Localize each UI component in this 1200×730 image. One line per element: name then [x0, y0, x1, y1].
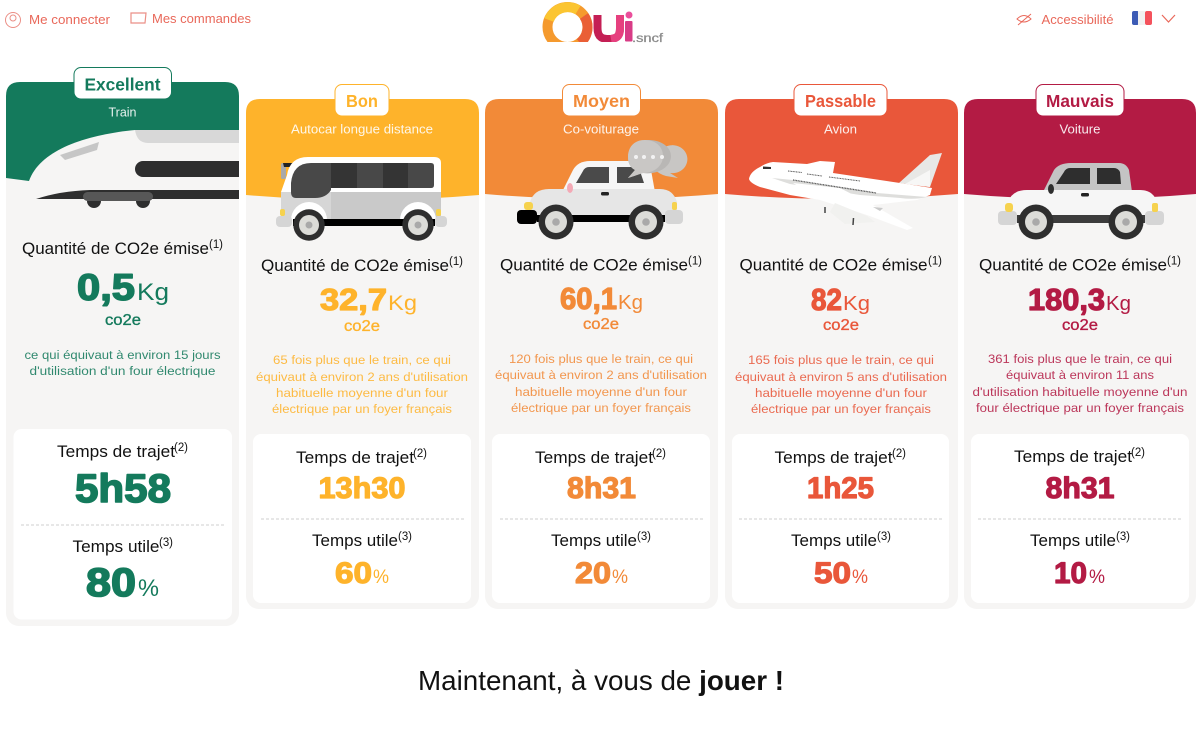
useful time: 20	[575, 557, 611, 590]
rating badge: Moyen	[573, 91, 630, 111]
travel time: (2)	[652, 448, 666, 460]
card background	[725, 99, 958, 609]
illustration: bus	[276, 157, 447, 241]
useful time: %	[138, 575, 159, 602]
rating badge	[335, 84, 389, 116]
useful time: %	[612, 567, 628, 588]
link: accessibilite: Accessibilité	[1042, 12, 1114, 27]
description: habituelle moyenne d'un four	[755, 386, 927, 400]
travel time: (2)	[1131, 447, 1145, 459]
useful time	[1030, 531, 1130, 590]
stats panel	[732, 434, 949, 603]
travel time	[535, 448, 666, 505]
icon: ticket	[131, 13, 146, 23]
description: d'utilisation habituelle moyenne d'un	[972, 385, 1188, 399]
co2 heading: (1)	[209, 239, 223, 251]
useful time: 10	[1054, 557, 1087, 590]
card background	[485, 99, 718, 609]
co2 heading: (1)	[688, 256, 702, 268]
travel time: Temps de trajet	[57, 443, 176, 461]
description: habituelle moyenne d'un four	[515, 385, 687, 399]
useful time: %	[852, 567, 868, 588]
co2 heading: Quantité de CO2e émise	[979, 256, 1167, 274]
useful time: 60	[335, 557, 372, 590]
rating badge	[794, 84, 887, 116]
speech bubbles	[628, 140, 687, 178]
header: accessibility and language	[1017, 11, 1175, 27]
travel time	[296, 448, 427, 505]
co2 heading: (1)	[449, 256, 463, 268]
description: électrique par un foyer français	[751, 402, 931, 416]
description: ce qui équivaut à environ 15 jours	[24, 348, 220, 362]
rating badge	[74, 68, 172, 99]
travel time: Temps de trajet	[535, 449, 654, 467]
description: électrique par un foyer français	[511, 401, 691, 415]
logo: OUI.sncf	[548, 7, 664, 47]
co2 value: co2e	[344, 318, 380, 335]
travel time: 8h31	[567, 472, 636, 505]
travel time: (2)	[413, 448, 427, 460]
travel time	[1014, 447, 1145, 505]
co2 value: Kg	[843, 293, 870, 315]
co2 value: 60,1	[560, 281, 617, 316]
panel: autocar bon	[246, 84, 479, 609]
co2 value: Kg	[388, 292, 417, 315]
co2 value	[320, 282, 417, 335]
co2 heading: Quantité de CO2e émise	[261, 257, 449, 275]
travel time: 8h31	[1046, 472, 1114, 505]
co2 value: co2e	[583, 316, 619, 333]
header: account links	[6, 11, 251, 28]
co2 heading: Quantité de CO2e émise	[22, 240, 209, 258]
co2 value: Kg	[1106, 293, 1131, 315]
co2 value: co2e	[1062, 317, 1098, 334]
mode: Train	[108, 106, 137, 120]
stats panel	[14, 429, 232, 620]
description: habituelle moyenne d'un four	[276, 386, 448, 400]
description: équivaut à environ 11 ans	[1006, 368, 1154, 382]
description: 120 fois plus que le train, ce qui	[509, 352, 693, 366]
icon: user	[6, 12, 20, 28]
description	[972, 352, 1188, 415]
card colour header	[6, 82, 239, 195]
card background	[6, 82, 239, 626]
co2 value: 82	[811, 282, 842, 317]
card background	[246, 99, 479, 609]
co2 heading: Quantité de CO2e émise	[500, 256, 688, 274]
icon: french flag	[1132, 11, 1152, 25]
travel time: 13h30	[318, 472, 406, 505]
illustration: plane	[749, 153, 942, 230]
co2 value: 180,3	[1028, 282, 1105, 317]
useful time: Temps utile	[72, 538, 160, 556]
co2 value: 0,5	[77, 267, 135, 308]
useful time: %	[1089, 567, 1105, 588]
useful time	[312, 531, 412, 590]
co2 value	[811, 282, 870, 334]
stats panel	[971, 434, 1189, 603]
mode: Voiture	[1060, 122, 1101, 136]
co2 value	[560, 281, 643, 333]
travel time: 5h58	[75, 467, 171, 511]
icon: eye crossed	[1017, 14, 1031, 25]
useful time: (3)	[877, 531, 891, 543]
travel time: (2)	[174, 442, 188, 454]
description	[256, 353, 468, 416]
useful time: (3)	[159, 537, 173, 549]
card background	[964, 99, 1196, 609]
travel time: Temps de trajet	[296, 449, 415, 467]
description: four électrique par un foyer français	[976, 401, 1184, 415]
logo suffix: .sncf	[632, 33, 664, 45]
description: d'utilisation d'un four électrique	[30, 364, 216, 378]
rating badge: Passable	[805, 91, 876, 111]
description: équivaut à environ 5 ans d'utilisation	[735, 370, 947, 384]
rating badge: Bon	[346, 91, 378, 111]
description: équivaut à environ 2 ans d'utilisation	[495, 368, 707, 382]
description: 65 fois plus que le train, ce qui	[273, 353, 451, 367]
useful time: Temps utile	[1030, 532, 1116, 550]
illustration: car	[998, 163, 1164, 240]
co2 value	[77, 267, 169, 329]
useful time: 50	[814, 557, 851, 590]
card colour header	[725, 99, 958, 199]
rating badge: Excellent	[84, 74, 161, 94]
useful time: (3)	[1116, 531, 1130, 543]
description: 165 fois plus que le train, ce qui	[748, 353, 934, 367]
description: 361 fois plus que le train, ce qui	[988, 352, 1172, 366]
link: mes commandes: Mes commandes	[152, 11, 251, 26]
useful time	[791, 531, 891, 590]
rating badge	[562, 84, 640, 116]
description: électrique par un foyer français	[272, 402, 452, 416]
travel time: (2)	[892, 448, 906, 460]
rating badge: Mauvais	[1046, 91, 1114, 111]
useful time: 80	[86, 561, 136, 605]
useful time	[72, 537, 173, 605]
closing headline: Maintenant, à vous de jouer !	[418, 665, 784, 696]
panel: train excellent	[6, 68, 239, 626]
stats panel	[253, 434, 471, 603]
icon: chevron	[1162, 15, 1175, 22]
travel time	[774, 448, 906, 505]
mode: Autocar longue distance	[291, 122, 433, 136]
panel: voiture mauvais	[964, 84, 1196, 609]
useful time: Temps utile	[312, 532, 398, 550]
co2 heading: (1)	[1167, 256, 1181, 268]
mode: Avion	[824, 122, 857, 136]
rating badge	[1036, 84, 1124, 116]
co2 value: Kg	[137, 279, 169, 306]
co2 value: co2e	[823, 317, 859, 334]
useful time: (3)	[398, 531, 412, 543]
mode: Co-voiturage	[563, 122, 639, 136]
illustration: car with speech bubbles	[517, 140, 687, 240]
description	[735, 353, 947, 416]
travel time: 1h25	[807, 472, 874, 505]
description	[24, 348, 220, 378]
card colour header	[964, 99, 1196, 199]
panel: co-voiturage moyen	[485, 84, 718, 609]
card colour header	[246, 99, 479, 200]
co2 heading: Quantité de CO2e émise	[740, 256, 928, 274]
useful time: %	[373, 567, 389, 588]
co2 value	[1028, 282, 1131, 334]
stats panel	[492, 434, 710, 603]
link: me connecter: Me connecter	[29, 12, 111, 27]
useful time: (3)	[637, 531, 651, 543]
travel time: Temps de trajet	[774, 449, 893, 467]
co2 heading: (1)	[928, 256, 942, 268]
co2 value: 32,7	[320, 282, 387, 317]
panel: avion passable	[725, 84, 958, 609]
travel time	[57, 442, 188, 511]
card colour header	[485, 99, 718, 199]
description	[495, 352, 707, 415]
useful time: Temps utile	[551, 532, 637, 550]
illustration: train	[29, 130, 239, 208]
co2 value: co2e	[105, 312, 141, 329]
useful time	[551, 531, 651, 590]
travel time: Temps de trajet	[1014, 448, 1133, 466]
useful time: Temps utile	[791, 532, 877, 550]
co2 value: Kg	[618, 292, 643, 314]
description: équivaut à environ 2 ans d'utilisation	[256, 370, 468, 384]
